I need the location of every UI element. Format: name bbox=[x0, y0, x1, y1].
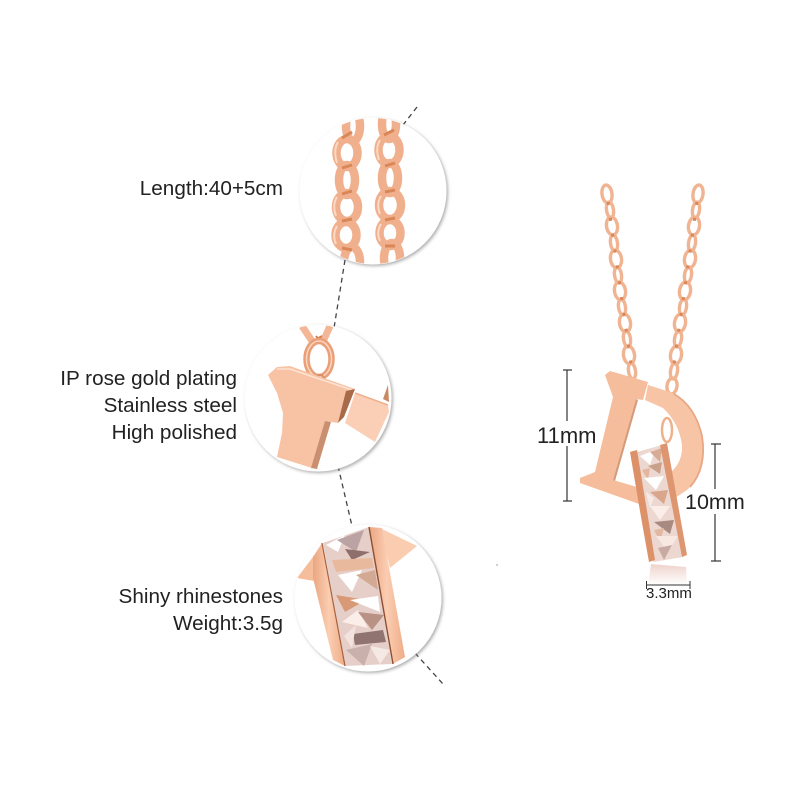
label: length: Length:40+5cm bbox=[140, 177, 283, 200]
label: rhinestones and weight: Shiny rhinestones bbox=[119, 585, 283, 608]
letter pieces bbox=[298, 555, 314, 581]
dimension: 10mm: 10mm bbox=[685, 490, 745, 514]
panel: rhinestone detail circle bbox=[294, 524, 442, 672]
dimension: 10mm bbox=[685, 444, 745, 561]
dimension: 11mm bbox=[537, 370, 596, 501]
right band bbox=[369, 527, 405, 664]
stray dot bbox=[496, 564, 498, 566]
label: material: High polished bbox=[112, 421, 237, 444]
ring facets bbox=[640, 448, 678, 560]
pendant: rhinestone ring bbox=[630, 443, 687, 562]
label: rhinestones and weight: Weight:3.5g bbox=[173, 612, 283, 635]
chain links right bbox=[378, 109, 401, 273]
dashed connector lines bbox=[334, 107, 443, 684]
chain links left bbox=[336, 111, 360, 277]
label: material bbox=[60, 367, 237, 444]
letter stem bbox=[268, 366, 355, 468]
label: material: Stainless steel bbox=[104, 394, 237, 417]
left band bbox=[313, 543, 345, 666]
stones bbox=[323, 527, 392, 666]
stone facets bbox=[326, 530, 390, 666]
necklace chain right bbox=[666, 184, 704, 395]
dimension: 3.3mm: 3.3mm bbox=[646, 585, 692, 602]
small inner link behind pendant bbox=[662, 418, 672, 442]
label: rhinestones and weight bbox=[119, 585, 283, 635]
chain junction shadows bbox=[342, 130, 395, 250]
panel: chain detail circle bbox=[300, 109, 446, 277]
chain highlights bbox=[334, 140, 381, 244]
necklace chain left bbox=[601, 184, 637, 379]
dimension: 11mm: 11mm bbox=[537, 423, 596, 448]
pendant reflection bbox=[648, 564, 687, 585]
pendant: letter D bbox=[580, 371, 703, 505]
letter D stem bbox=[580, 371, 648, 505]
label: material: IP rose gold plating bbox=[60, 367, 237, 390]
panel: pendant polish detail circle bbox=[244, 324, 392, 472]
letter D bowl bbox=[645, 385, 702, 498]
jump ring and chain bbox=[302, 326, 332, 383]
letter bowl bbox=[345, 393, 389, 442]
